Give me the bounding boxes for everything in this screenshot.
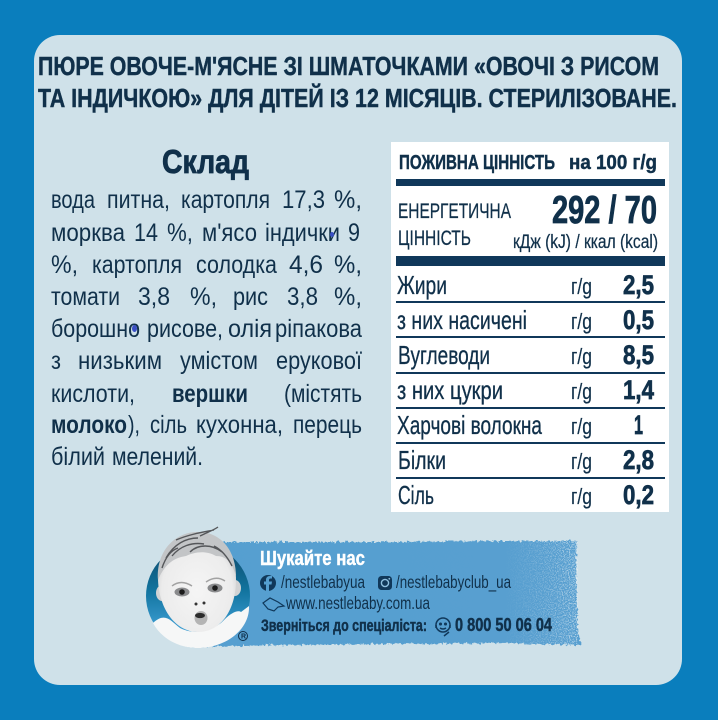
facebook handle: /nestlebabyua [281, 572, 365, 592]
composition text: %, [334, 283, 362, 311]
table header: на 100 г/g [569, 152, 657, 174]
row: saturated: з них насичені [397, 305, 527, 335]
row: sugars: 1,4 [623, 375, 654, 405]
composition text: %, [190, 283, 217, 311]
composition text: вершки [172, 380, 248, 408]
composition text: 3,8 [138, 283, 170, 311]
composition text: низьким [78, 347, 162, 375]
composition text: олія [228, 315, 272, 343]
energy value: кДж (kJ) / ккал (kcal) [513, 232, 658, 253]
row: fats: 2,5 [623, 270, 654, 300]
row: salt [398, 480, 654, 510]
composition text: рисове, [147, 315, 223, 343]
composition text: 4,6 [289, 251, 323, 279]
icon: instagram [378, 576, 392, 590]
mark: blue dot on second line [330, 232, 334, 237]
phone number: 0 800 50 06 04 [455, 615, 552, 635]
icon: headset [436, 618, 450, 636]
composition text: ерукової [276, 347, 362, 375]
energy value [396, 189, 665, 266]
row: sugars: г/g [571, 379, 592, 404]
composition text: мелений. [112, 443, 203, 471]
banner: contacts brush stroke [205, 541, 581, 647]
row: fibre: Харчові волокна [397, 410, 542, 440]
row: salt: 0,2 [623, 480, 654, 510]
row: protein: Білки [398, 445, 446, 475]
composition text: питна, [107, 186, 170, 214]
panel: nutrition table [391, 142, 669, 512]
composition text: молоко [51, 411, 127, 439]
composition text: солодка [196, 251, 277, 279]
icon: facebook [260, 575, 276, 591]
composition text: (містять [284, 380, 362, 408]
row: fibre [396, 410, 665, 444]
row: fibre: 1 [634, 410, 643, 440]
row: protein: г/g [571, 449, 592, 474]
table header: ПОЖИВНА ЦІННІСТЬ [399, 152, 555, 174]
row: sugars: з них цукри [397, 375, 503, 405]
composition text: борошно [51, 315, 140, 343]
row: fats: г/g [571, 274, 592, 299]
composition text: картопля [92, 251, 182, 279]
composition text: 9 [348, 219, 360, 247]
icon: baby portrait [146, 527, 250, 648]
row: carbohydrates [396, 340, 665, 374]
specialist label: Зверніться до спеціаліста: [261, 616, 427, 635]
composition text: умістом [180, 347, 258, 375]
row: fats [396, 270, 665, 303]
instagram handle: /nestlebabyclub_ua [396, 572, 511, 593]
mark: blue dot on fifth line [132, 325, 137, 332]
row: carbohydrates: г/g [571, 344, 592, 369]
icon: registered mark [238, 632, 248, 640]
composition text: %, [334, 186, 362, 214]
row: salt: Сіль [398, 480, 434, 510]
composition text: томати [51, 283, 120, 311]
title [38, 51, 677, 113]
icon: pointing hand [263, 598, 284, 611]
table header [396, 152, 665, 186]
composition text: вода [51, 186, 95, 214]
banner heading: Шукайте нас [260, 548, 365, 570]
energy value: 292 / 70 [552, 189, 657, 232]
composition text: 3,8 [287, 283, 318, 311]
composition text: рис [233, 283, 268, 311]
composition text: картопля [181, 186, 270, 214]
row: fibre: г/g [571, 414, 592, 439]
composition text: кухонна, [196, 411, 283, 439]
row: saturated: г/g [571, 309, 592, 334]
row: saturated [396, 305, 665, 338]
composition text: %, [334, 251, 362, 279]
energy value: ЕНЕРГЕТИЧНА [398, 200, 511, 223]
row: salt: г/g [571, 484, 592, 509]
icon: registered mark: R [241, 634, 246, 640]
composition text: білий [51, 443, 105, 471]
composition text: ), [128, 411, 140, 439]
composition text: з [51, 347, 61, 375]
composition text: сіль [150, 411, 187, 439]
row: protein: 2,8 [623, 445, 654, 475]
composition text: індички [265, 219, 340, 247]
row: fats: Жири [397, 270, 447, 300]
row: sugars [396, 375, 665, 409]
website: www.nestlebaby.com.ua [285, 593, 430, 613]
row: carbohydrates: 8,5 [623, 340, 654, 370]
composition text: морква [51, 219, 125, 247]
composition text: %, [167, 219, 193, 247]
energy value: ЦІННІСТЬ [398, 227, 471, 250]
composition text: 17,3 [282, 186, 325, 214]
row: carbohydrates: Вуглеводи [398, 340, 490, 370]
composition text: ріпакова [275, 315, 362, 343]
composition text: перець [293, 411, 362, 439]
composition text: кислоти, [51, 380, 135, 408]
composition text [51, 186, 362, 471]
composition text: %, [51, 251, 78, 279]
row: saturated: 0,5 [623, 305, 654, 335]
heading: composition: Склад [162, 143, 249, 180]
row: protein [396, 445, 665, 479]
composition text: м'ясо [202, 219, 257, 247]
composition text: 14 [134, 219, 158, 247]
